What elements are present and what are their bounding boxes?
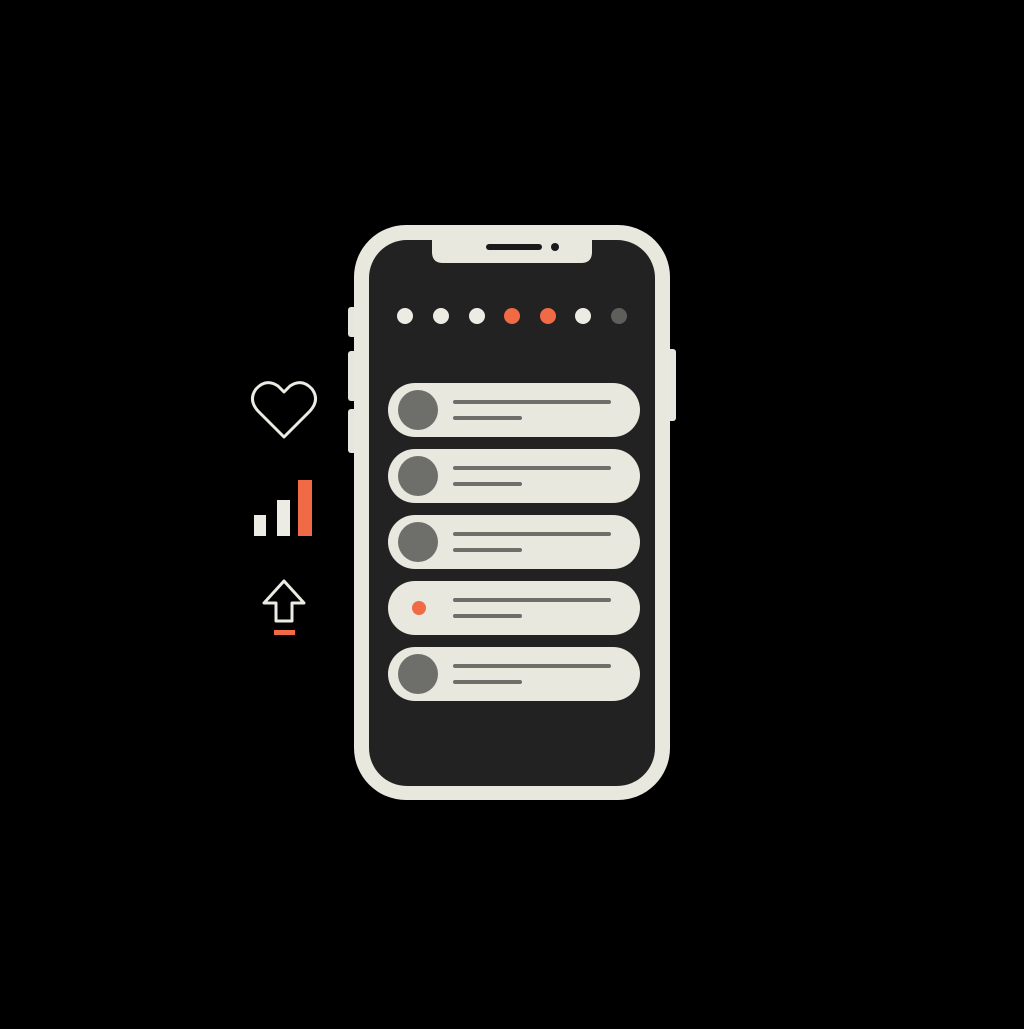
screen — [369, 240, 655, 786]
camera — [551, 243, 559, 251]
icon: heart — [252, 383, 316, 437]
card 2 — [388, 449, 640, 503]
card 5 — [388, 647, 640, 701]
speaker — [486, 244, 542, 250]
notch — [432, 240, 592, 263]
phone — [348, 225, 676, 800]
page dots — [397, 308, 627, 324]
side buttons — [348, 307, 676, 453]
list cards — [388, 383, 640, 701]
card 4 highlighted — [388, 581, 640, 635]
icon: signal bars — [254, 480, 312, 536]
icon: upload arrow — [264, 581, 304, 635]
card 3 — [388, 515, 640, 569]
phone body — [354, 225, 670, 800]
card 1 — [388, 383, 640, 437]
